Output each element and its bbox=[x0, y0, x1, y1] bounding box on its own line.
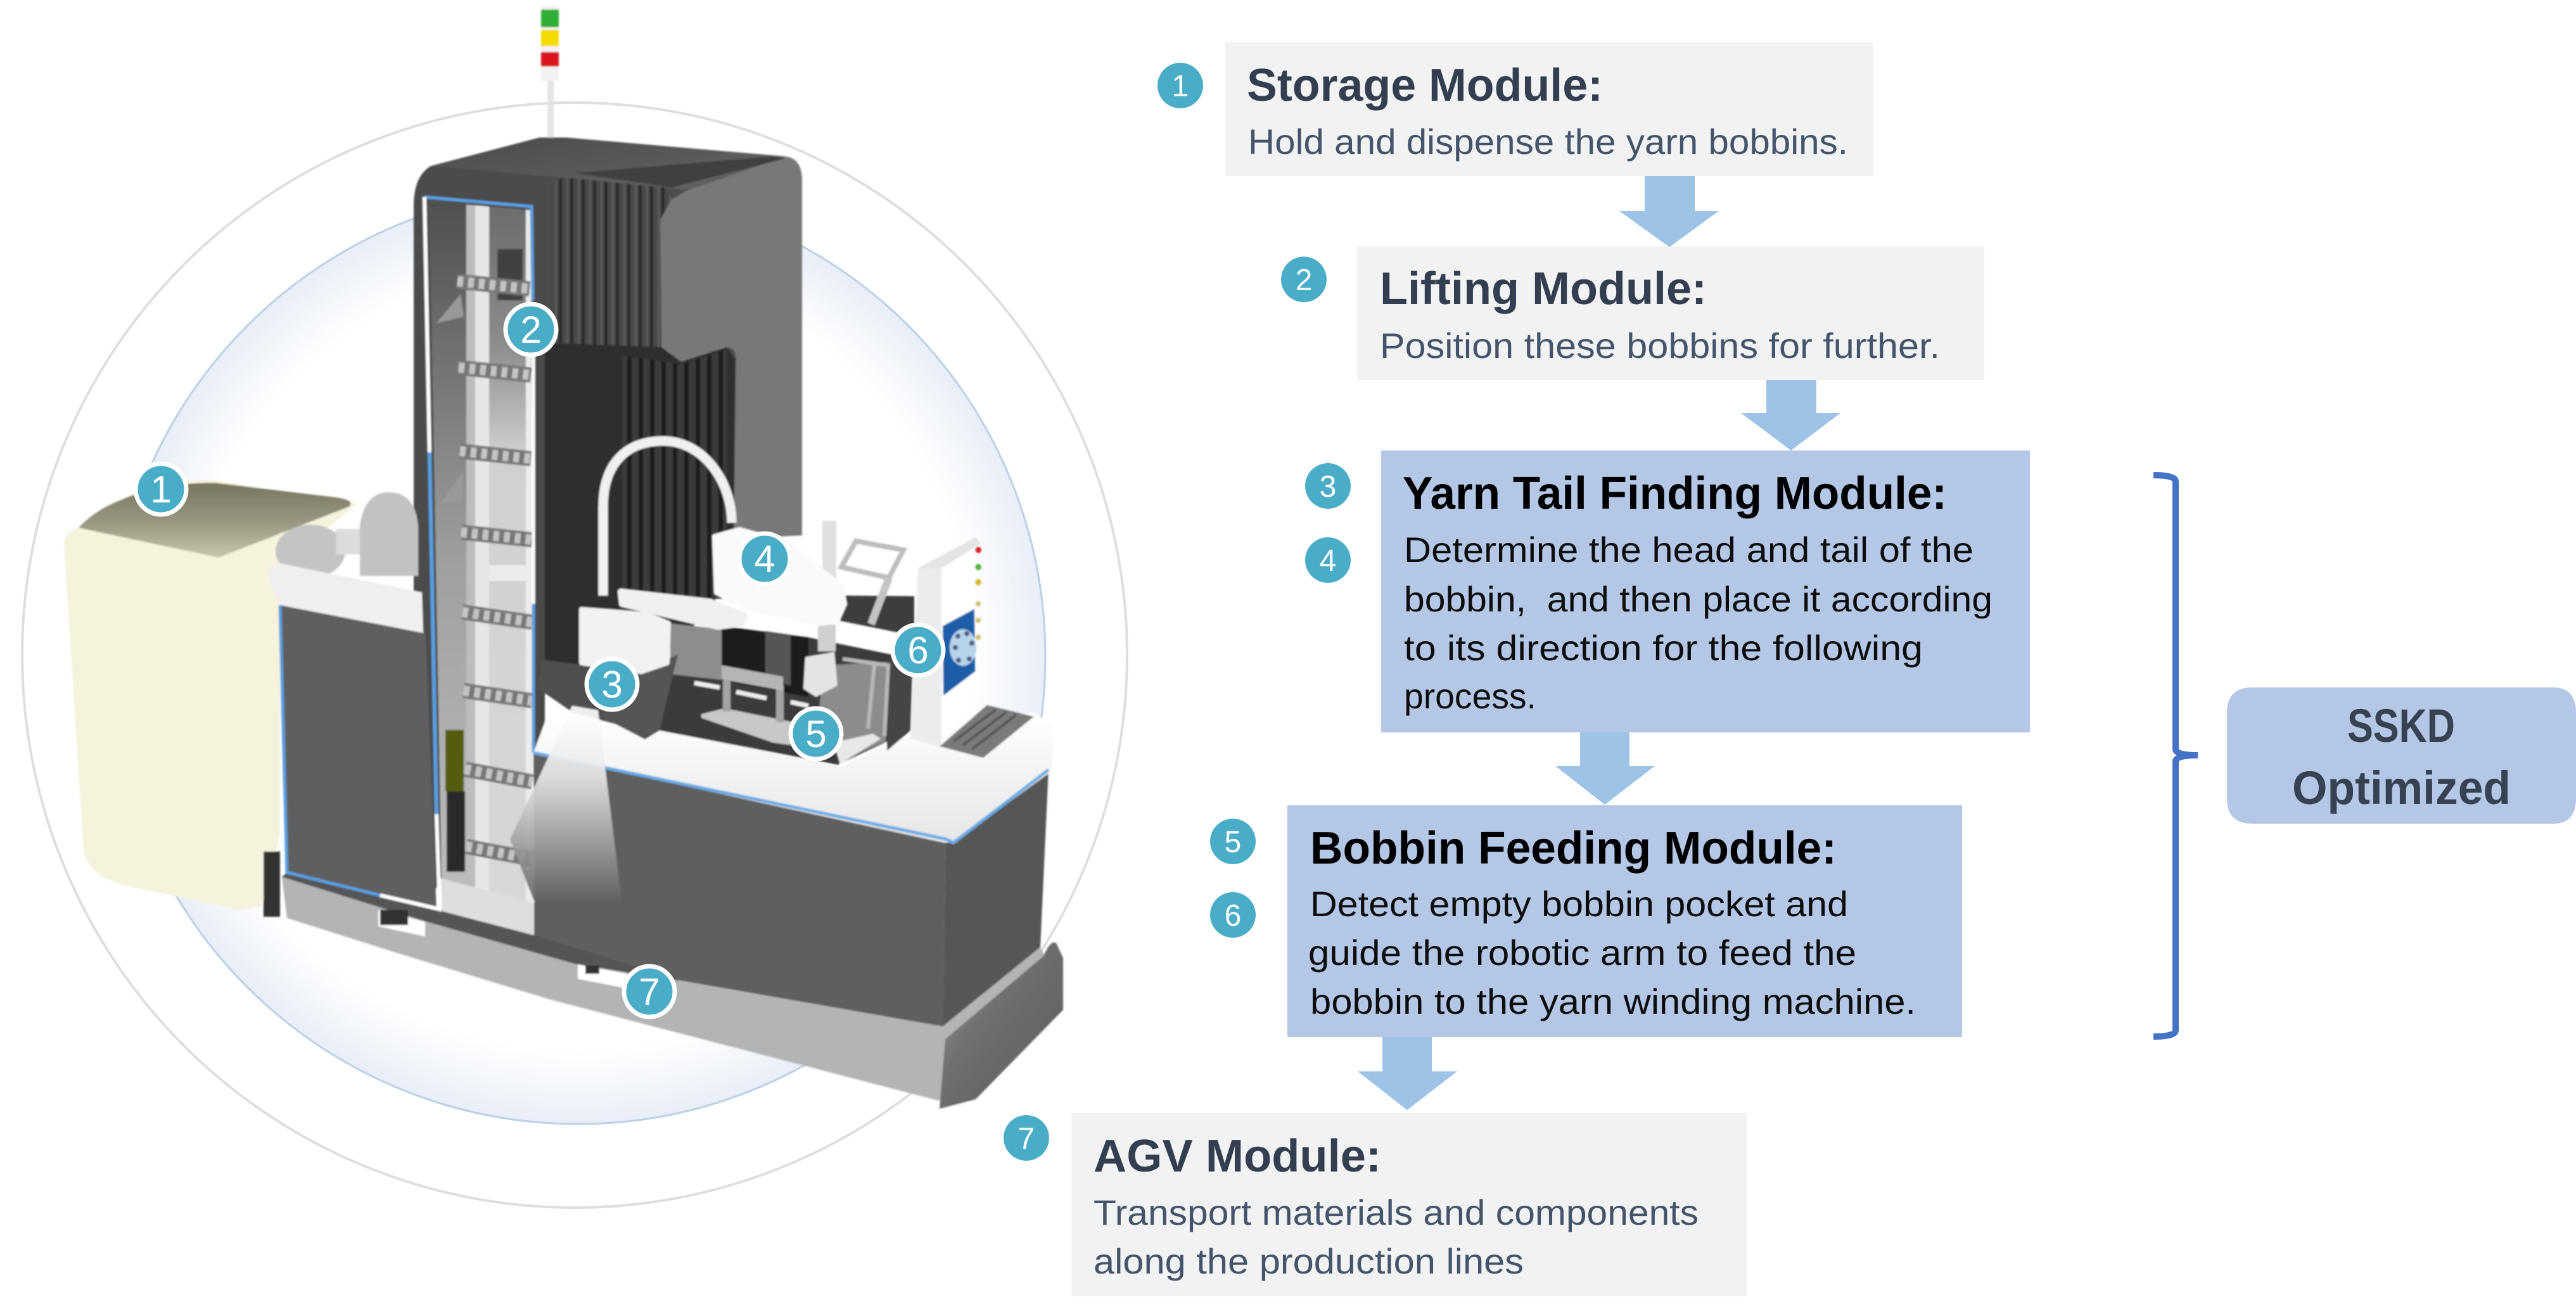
badge 5: 5 bbox=[1225, 826, 1241, 859]
text: storage description: Hold and dispense the yarn bobbins. bbox=[1248, 122, 1848, 162]
arrow: storage to lifting bbox=[1619, 176, 1719, 247]
work cell interior bbox=[537, 596, 914, 765]
panel: lifting module bbox=[1357, 246, 1984, 380]
inspection light beam bbox=[510, 706, 622, 905]
machine callout badge 7: 7 bbox=[639, 971, 660, 1013]
machine illustration bbox=[64, 6, 1063, 1109]
operator display panel and keyboard bbox=[910, 537, 1034, 758]
callout: SSKD optimized: SSKD bbox=[2347, 699, 2455, 752]
text: bobbin feeding description bbox=[1308, 884, 1916, 1021]
text: AGV description: along the production lines bbox=[1094, 1241, 1524, 1281]
AGV base and bumper bbox=[282, 872, 1063, 1109]
machine callout badge 6: 6 bbox=[907, 629, 929, 672]
text: lifting description: Position these bobbins for further. bbox=[1380, 326, 1940, 366]
badge 5 bbox=[1210, 819, 1256, 864]
heading: storage module: Storage Module: bbox=[1247, 60, 1603, 111]
heading: yarn tail finding module: Yarn Tail Finding Module: bbox=[1403, 468, 1947, 519]
machine callout badge 3: 3 bbox=[601, 663, 623, 706]
badge 4: 4 bbox=[1320, 544, 1336, 578]
badge 7: 7 bbox=[1018, 1122, 1035, 1156]
heading: AGV module: AGV Module: bbox=[1094, 1131, 1381, 1182]
tower housing bbox=[414, 137, 802, 912]
text: AGV description: Transport materials and components bbox=[1094, 1192, 1699, 1232]
machine callout badge 4 bbox=[739, 533, 790, 584]
text: yarn tail description: to its direction for the following bbox=[1404, 628, 1923, 668]
arrow: lifting to yarn tail finding bbox=[1741, 380, 1840, 450]
panel: storage module bbox=[1225, 42, 1873, 176]
text: bobbin feeding description: Detect empty bobbin pocket and bbox=[1310, 884, 1848, 924]
left enclosure panel bbox=[269, 452, 440, 910]
panel: yarn tail finding module bbox=[1381, 450, 2030, 732]
arrow: bobbin feeding to AGV bbox=[1358, 1037, 1457, 1110]
machine callout badge 7 bbox=[624, 966, 675, 1017]
machine callout badge 6 bbox=[893, 625, 943, 675]
machine callout badge 5 bbox=[791, 708, 841, 759]
background rings bbox=[22, 103, 1127, 1208]
callout: SSKD optimized bbox=[2227, 687, 2576, 824]
text: AGV description bbox=[1094, 1192, 1699, 1281]
text: yarn tail description: bobbin, and then place it according bbox=[1404, 579, 1993, 619]
machine callout badge 4: 4 bbox=[754, 538, 775, 580]
badge 1: 1 bbox=[1172, 70, 1189, 103]
machine callout badge 5: 5 bbox=[805, 713, 827, 755]
text: bobbin feeding description: bobbin to the yarn winding machine. bbox=[1310, 981, 1916, 1021]
machine callout badge 2 bbox=[506, 304, 556, 355]
badge 4 bbox=[1305, 537, 1351, 583]
badge 3 bbox=[1305, 463, 1351, 509]
machine callout badge 1: 1 bbox=[150, 468, 172, 511]
text: yarn tail description: process. bbox=[1404, 676, 1536, 716]
badge 7 bbox=[1004, 1115, 1049, 1161]
heading: bobbin feeding module: Bobbin Feeding Module: bbox=[1310, 823, 1837, 874]
yarn bobbin bin bbox=[64, 480, 357, 917]
panel: bobbin feeding module bbox=[1287, 805, 1962, 1037]
text: bobbin feeding description: guide the robotic arm to feed the bbox=[1308, 933, 1856, 973]
panel: AGV module bbox=[1071, 1113, 1747, 1296]
badge 2: 2 bbox=[1296, 264, 1312, 297]
badge 2 bbox=[1281, 257, 1327, 302]
machine callout badge 1 bbox=[136, 464, 186, 514]
callout: SSKD optimized: Optimized bbox=[2292, 762, 2511, 814]
machine callout badge 3 bbox=[587, 659, 637, 710]
arrow: yarn tail finding to bobbin feeding bbox=[1555, 732, 1655, 805]
text: yarn tail description: Determine the head and tail of the bbox=[1404, 530, 1973, 570]
badge 6: 6 bbox=[1225, 899, 1241, 933]
bracket: SSKD optimized modules bbox=[2153, 475, 2198, 1037]
badge 6 bbox=[1210, 892, 1256, 938]
machine body and table top bbox=[533, 713, 1053, 1026]
text: yarn tail description bbox=[1404, 530, 1993, 716]
heading: lifting module: Lifting Module: bbox=[1380, 264, 1707, 314]
machine callout badge 2: 2 bbox=[520, 309, 542, 351]
badge 1 bbox=[1157, 63, 1203, 108]
badge 3: 3 bbox=[1320, 470, 1336, 504]
SCARA robot arm bbox=[582, 441, 903, 672]
signal tower lamp bbox=[541, 6, 559, 138]
bobbin lift rack bbox=[424, 196, 539, 938]
